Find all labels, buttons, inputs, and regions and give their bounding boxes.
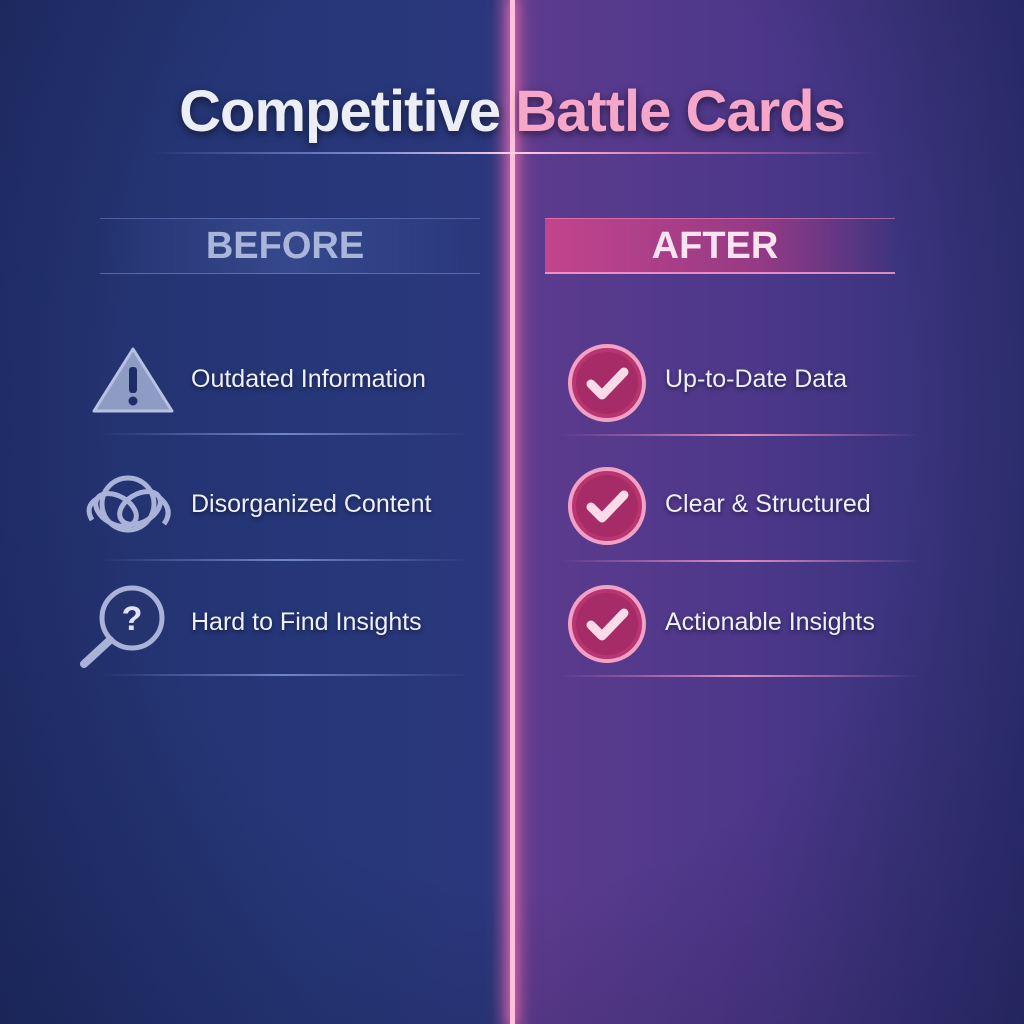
- after item 1: check icon: [568, 344, 646, 422]
- before text 2: Disorganized Content: [191, 490, 431, 518]
- before item 2: tangled icon: [86, 476, 171, 532]
- after text 3: Actionable Insights: [665, 608, 875, 636]
- BEFORE header: [100, 218, 480, 274]
- title: Competitive Battle Cards: [179, 79, 845, 144]
- after item 3: check icon: [568, 585, 646, 663]
- before text 3: Hard to Find Insights: [191, 608, 422, 636]
- before item 3: magnifier question icon: ?: [122, 600, 142, 638]
- after text 1: Up-to-Date Data: [665, 365, 847, 393]
- before text 1: Outdated Information: [191, 365, 426, 393]
- after text 2: Clear & Structured: [665, 490, 871, 518]
- AFTER header: AFTER: [652, 225, 778, 267]
- AFTER header: [545, 218, 895, 274]
- BEFORE header: BEFORE: [206, 225, 364, 267]
- after item 2: check icon: [568, 467, 646, 545]
- before item 1: warning icon: [92, 347, 174, 412]
- center glowing divider line: [492, 0, 532, 1024]
- before item 3: magnifier question icon: [80, 586, 164, 668]
